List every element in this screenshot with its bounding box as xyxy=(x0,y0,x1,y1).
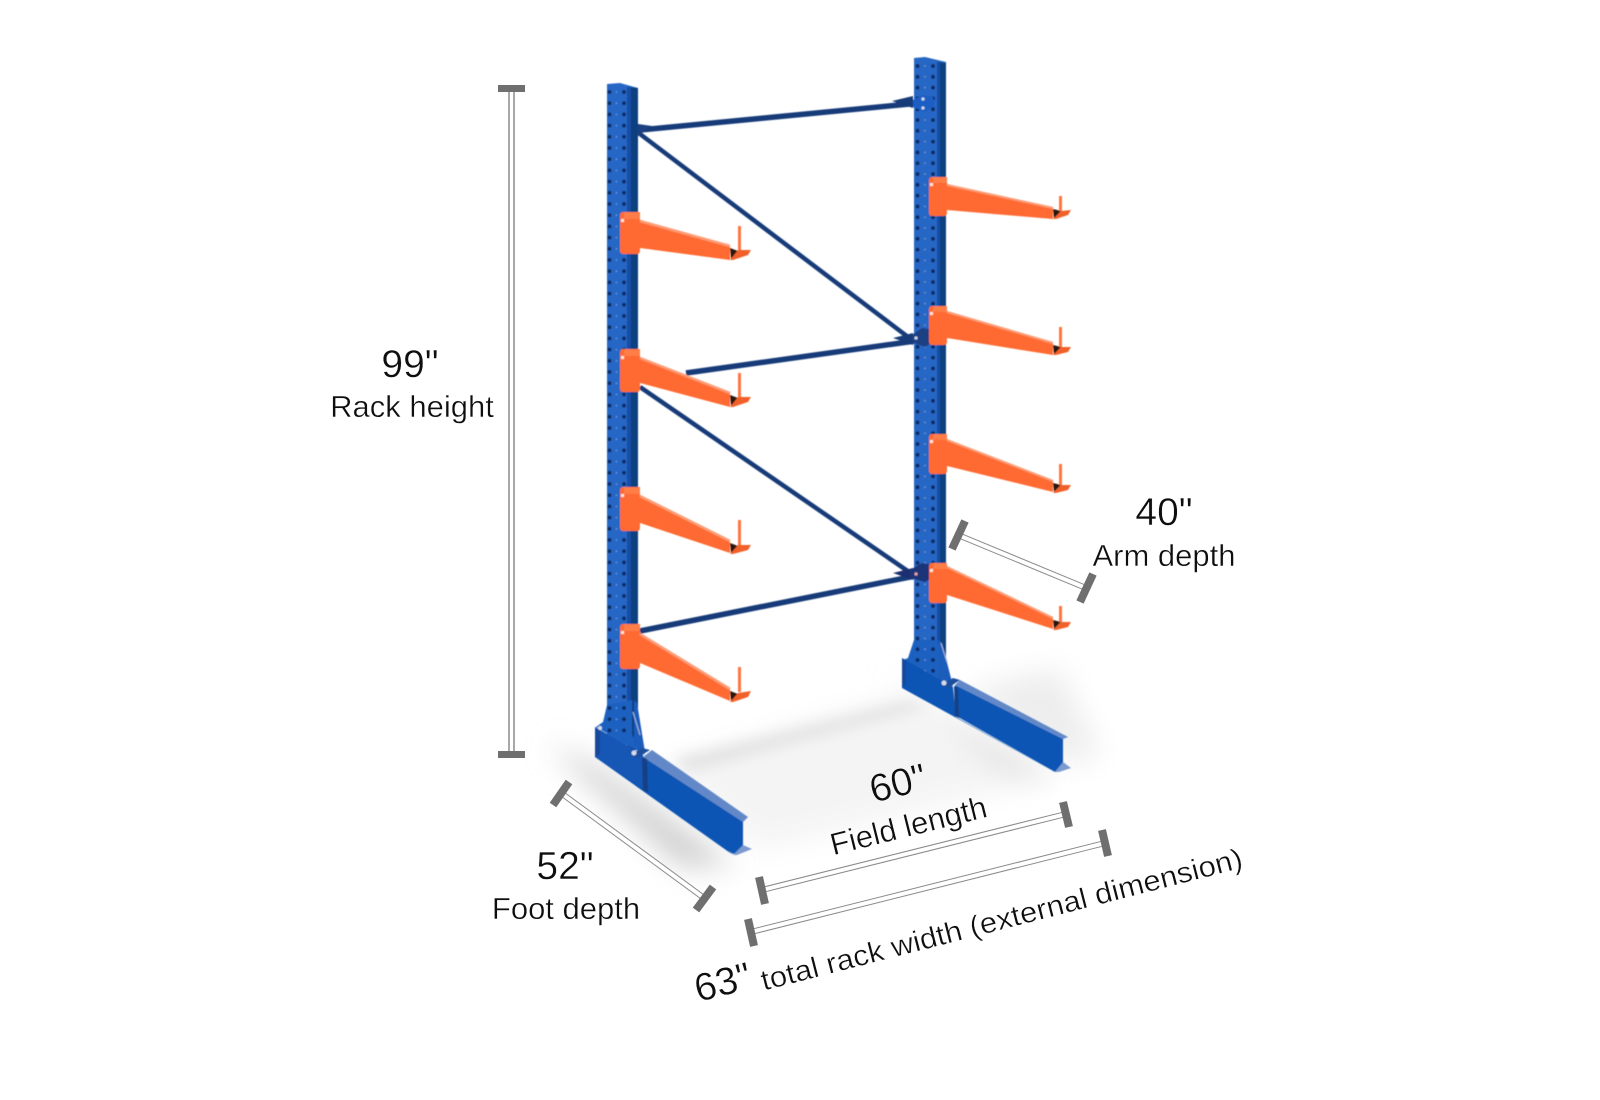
right arm 4 xyxy=(929,563,1071,630)
label: 99 inch rack height xyxy=(330,343,494,424)
label: 40 inch arm depth: 40" xyxy=(1135,491,1193,534)
right arm 3 xyxy=(929,434,1071,493)
brace connector plates xyxy=(910,95,936,582)
left arm 3 xyxy=(620,487,751,554)
right arm 2 xyxy=(929,306,1071,355)
dimension: total rack width xyxy=(748,830,1108,946)
cross braces xyxy=(638,96,920,631)
label: 99 inch rack height: Rack height xyxy=(330,389,494,424)
dimension: arm depth xyxy=(952,521,1093,602)
right foot xyxy=(902,658,1071,772)
left arm 1 xyxy=(620,212,751,260)
label: 52 inch foot depth: 52" xyxy=(536,845,594,888)
floor shadows xyxy=(548,668,1100,866)
label: 63 inch total rack width: 63" xyxy=(690,955,756,1011)
label: 52 inch foot depth: Foot depth xyxy=(492,891,640,926)
left upright column xyxy=(596,83,645,755)
label: 60 inch field length xyxy=(826,756,990,862)
right upright column xyxy=(903,57,953,688)
left arm 4 xyxy=(620,624,751,702)
label: 52 inch foot depth xyxy=(492,845,640,926)
dimension: foot depth xyxy=(553,782,713,910)
dimension: rack height xyxy=(498,85,525,758)
label: 60 inch field length: 60" xyxy=(865,756,931,812)
left arm 2 xyxy=(620,349,751,407)
label: 63 inch total rack width: total rack width (external dimension) xyxy=(758,843,1246,997)
cantilever rack xyxy=(595,57,1071,855)
label: 99 inch rack height: 99" xyxy=(381,343,439,386)
left foot xyxy=(595,726,752,855)
label: 40 inch arm depth xyxy=(1092,491,1236,573)
label: 40 inch arm depth: Arm depth xyxy=(1092,538,1236,573)
right arm 1 xyxy=(929,177,1071,219)
label: 60 inch field length: Field length xyxy=(826,789,990,862)
dimension: field length xyxy=(759,802,1069,904)
